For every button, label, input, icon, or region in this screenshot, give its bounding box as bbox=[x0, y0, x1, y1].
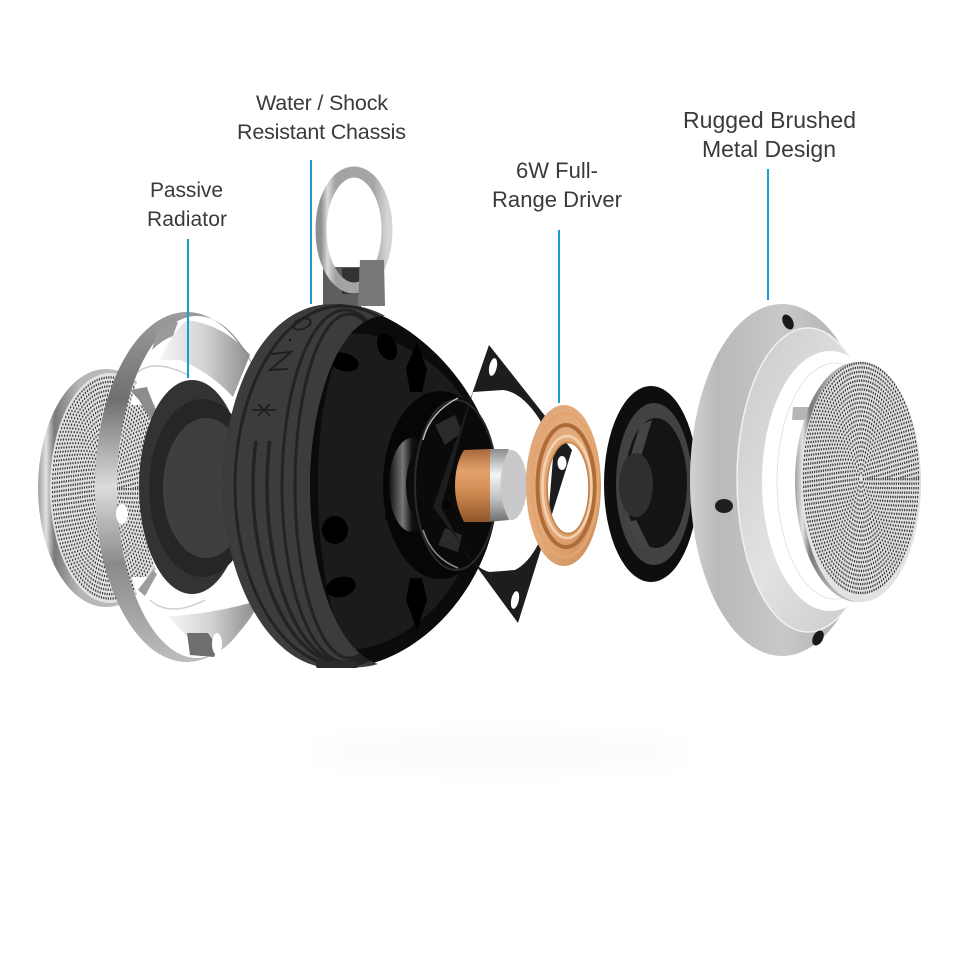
plate screw holes bbox=[780, 313, 796, 331]
ring highlight bbox=[542, 436, 592, 538]
white arc lines bbox=[138, 366, 190, 376]
icon: dot bbox=[289, 339, 291, 341]
interior tab bbox=[792, 407, 810, 420]
leader line: metal design bbox=[767, 169, 769, 300]
radiator surround bbox=[139, 380, 245, 594]
label: rugged brushed metal design: Rugged Brushed bbox=[683, 107, 856, 133]
ring groove bbox=[538, 425, 594, 547]
label: rugged brushed metal design bbox=[683, 107, 856, 162]
dome screw bosses bbox=[322, 331, 427, 630]
inner strut bottom bbox=[138, 570, 157, 596]
grille face bbox=[801, 362, 921, 602]
label: passive radiator: Radiator bbox=[147, 208, 227, 231]
perforated dots bbox=[804, 363, 918, 593]
tyre ridges bbox=[234, 304, 380, 666]
top cone bbox=[160, 320, 250, 397]
frame mounting holes bbox=[487, 357, 499, 377]
label: driver bbox=[492, 158, 622, 212]
white interior bbox=[140, 367, 256, 607]
label: water shock resistant chassis bbox=[237, 91, 406, 144]
magnet core bbox=[406, 443, 450, 527]
small woofer driver bbox=[604, 386, 698, 582]
coil cap bbox=[495, 450, 527, 520]
leader line: passive radiator bbox=[187, 239, 189, 378]
icon: bluetooth bbox=[252, 404, 276, 416]
label: water shock resistant chassis: Resistant Chassis bbox=[237, 120, 406, 144]
carabiner ring bbox=[321, 172, 387, 288]
icon: power ring bbox=[292, 316, 312, 332]
woofer cone spokes bbox=[630, 420, 652, 460]
copper surround ring bbox=[526, 405, 601, 566]
leader line: driver bbox=[558, 230, 560, 403]
hole edge bbox=[547, 442, 589, 534]
panel: driver basket and magnet bbox=[389, 398, 497, 570]
panel: black chassis bbox=[223, 172, 498, 668]
grille rim bbox=[795, 362, 921, 602]
woofer dome bbox=[619, 453, 653, 517]
dome inner panel bbox=[318, 334, 480, 650]
inner strut top bbox=[130, 387, 158, 420]
label: passive radiator bbox=[147, 179, 227, 231]
basket outline bbox=[415, 400, 497, 570]
label: passive radiator: Passive bbox=[150, 179, 223, 202]
leader line: chassis bbox=[310, 160, 312, 304]
speaker mounting frame bbox=[433, 345, 572, 623]
radiator diaphragm bbox=[163, 418, 249, 558]
carabiner tab front bbox=[358, 260, 385, 306]
coil copper winding bbox=[455, 449, 490, 522]
icon: play bbox=[270, 352, 291, 370]
outer silver ring bbox=[95, 312, 279, 662]
outer plate bbox=[690, 304, 874, 656]
woofer surround bbox=[616, 403, 692, 565]
label: rugged brushed metal design: Metal Design bbox=[702, 136, 836, 162]
coil silver band bbox=[487, 449, 509, 522]
basket struts bbox=[435, 415, 462, 445]
plate middle step bbox=[737, 328, 879, 632]
woofer frame bbox=[604, 386, 698, 582]
interior line bbox=[777, 363, 893, 599]
panel: left grille bbox=[38, 369, 174, 607]
magnet bbox=[389, 438, 435, 532]
rubber tyre bbox=[223, 304, 385, 668]
label: water shock resistant chassis: Water / Shock bbox=[256, 91, 388, 115]
screw holes bbox=[116, 504, 128, 524]
voice coil bbox=[455, 449, 527, 522]
label: driver: Range Driver bbox=[492, 187, 622, 212]
radiator rubber roll bbox=[149, 399, 255, 577]
chassis dome bbox=[223, 304, 498, 668]
woofer cone bbox=[625, 418, 687, 548]
grille rim bbox=[38, 369, 174, 607]
panel: rugged metal cover bbox=[690, 304, 921, 656]
dome centre recess bbox=[383, 391, 497, 579]
label: driver: 6W Full- bbox=[516, 158, 598, 183]
carabiner tab back bbox=[323, 267, 361, 307]
icon: bottom port bbox=[316, 661, 358, 668]
ground shadow bbox=[310, 736, 690, 768]
white interior bbox=[762, 351, 898, 611]
bottom cone bbox=[168, 603, 254, 650]
grille face bbox=[50, 373, 170, 603]
panel: passive radiator housing bbox=[95, 312, 279, 662]
outer band bbox=[532, 413, 598, 557]
passive radiator bbox=[139, 380, 255, 594]
perforated dots bbox=[52, 377, 168, 599]
